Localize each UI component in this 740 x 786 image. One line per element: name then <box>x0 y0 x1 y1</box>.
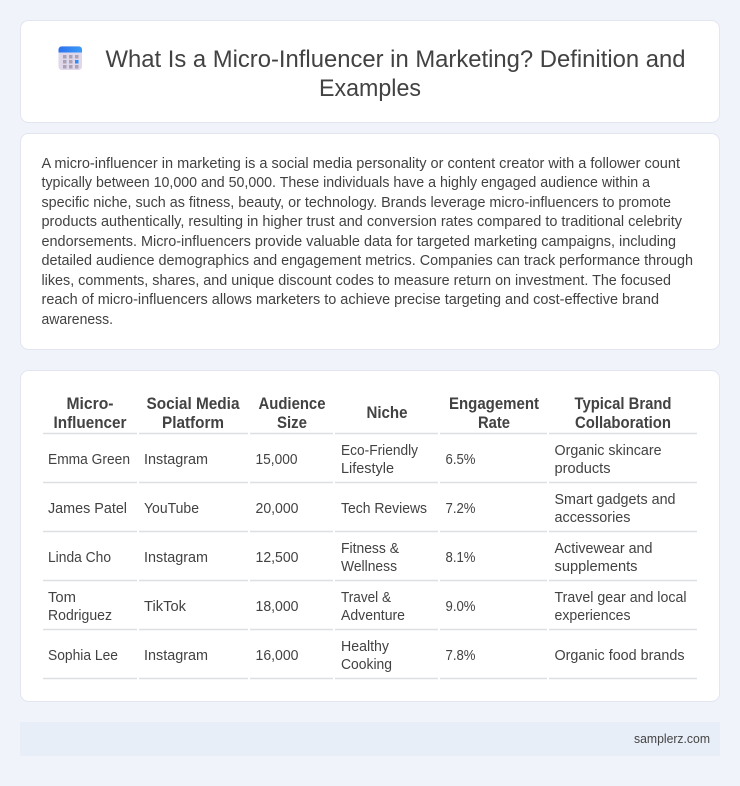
text block: definition paragraph <box>42 156 693 328</box>
table row: Sophia Lee <box>48 639 684 673</box>
heading: Examples <box>319 75 421 102</box>
table row: Tom Rodriguez: Tom <box>48 590 76 606</box>
table row: Sophia Lee: Sophia Lee <box>48 648 118 664</box>
table header: Engagement <box>449 395 540 413</box>
heading <box>106 46 686 102</box>
table row: Sophia Lee: Instagram <box>144 648 208 664</box>
panel: title card <box>20 20 720 122</box>
table row: Emma Green: Instagram <box>144 452 208 468</box>
table row: Tom Rodriguez <box>48 590 686 624</box>
table row: James Patel: James Patel <box>48 501 127 517</box>
table header: Collaboration <box>575 414 671 432</box>
text block: definition paragraph: likes, comments, shares, and unique discount codes to measure return on investment. The focused <box>42 273 671 289</box>
text block: definition paragraph: products authentically, resulting in higher trust and conversion rates compared to traditional celebrity <box>42 214 683 230</box>
table header: Platform <box>162 414 224 432</box>
table header: Typical Brand <box>574 395 672 413</box>
table row: Tom Rodriguez: experiences <box>554 608 630 624</box>
table row: Emma Green: Emma Green <box>48 452 130 468</box>
icon: calendar <box>58 46 82 70</box>
table row: James Patel <box>48 492 676 526</box>
table row: Emma Green: 15,000 <box>256 452 298 468</box>
panel: micro-influencer table <box>20 370 720 702</box>
text block: definition paragraph: detailed audience demographics and engagement metrics. Companies can track performance through <box>42 253 693 269</box>
table row: Tom Rodriguez: TikTok <box>144 599 187 615</box>
footer bar <box>20 722 720 756</box>
table row: Emma Green <box>48 443 662 477</box>
table header: Social Media <box>146 395 240 413</box>
table header: Size <box>277 414 307 432</box>
table row: James Patel: 20,000 <box>256 501 298 517</box>
table row: Sophia Lee: Healthy <box>341 639 390 655</box>
table row: James Patel: Smart gadgets and <box>554 492 676 508</box>
text block: definition paragraph: awareness. <box>42 312 113 328</box>
table row: James Patel: accessories <box>554 510 630 526</box>
table row: Sophia Lee: Organic food brands <box>554 648 684 664</box>
table row: Emma Green: 6.5% <box>446 452 476 468</box>
table row: Linda Cho: supplements <box>554 559 638 575</box>
table row: Linda Cho: Linda Cho <box>48 550 111 566</box>
table row: Tom Rodriguez: 18,000 <box>256 599 298 615</box>
table row: Tom Rodriguez: Travel & <box>341 590 391 606</box>
table row: Sophia Lee: 7.8% <box>446 648 476 664</box>
table row: Linda Cho: 8.1% <box>446 550 476 566</box>
table row: Emma Green: Eco-Friendly <box>341 443 419 459</box>
table row: Sophia Lee: 16,000 <box>256 648 298 664</box>
table row: Linda Cho: Activewear and <box>554 541 652 557</box>
table row: Tom Rodriguez: Travel gear and local <box>554 590 686 606</box>
table row: Linda Cho: Wellness <box>341 559 397 575</box>
table row: Emma Green: products <box>554 461 610 477</box>
panel: definition text <box>20 134 720 350</box>
heading: What Is a Micro-Influencer in Marketing? Definition and <box>106 46 686 73</box>
text block: definition paragraph: reach of micro-influencers allows marketers to achieve precise targeting and cost-effective brand <box>42 292 659 308</box>
table row: Tom Rodriguez: 9.0% <box>446 599 476 615</box>
text block: definition paragraph: A micro-influencer in marketing is a social media personality or content creator with a follower count <box>42 156 680 172</box>
table row: Tom Rodriguez: Adventure <box>341 608 405 624</box>
table header: Influencer <box>54 414 127 432</box>
table header: Rate <box>478 414 510 432</box>
table header: Niche <box>366 404 408 422</box>
table row: Linda Cho: Instagram <box>144 550 208 566</box>
table row: James Patel: Tech Reviews <box>341 501 427 517</box>
text block: definition paragraph: specific niche, such as fitness, beauty, or technology. Brands leverage micro-influencers to promote <box>42 195 671 211</box>
table row: Tom Rodriguez: Rodriguez <box>48 608 112 624</box>
text block: definition paragraph: endorsements. Micro-influencers provide valuable data for targeted marketing campaigns, including <box>42 234 676 250</box>
text block: definition paragraph: typically between 10,000 and 50,000. These individuals have a highly engaged audience within a <box>42 175 651 191</box>
table row: Linda Cho <box>48 541 652 575</box>
table row: Emma Green: Organic skincare <box>554 443 662 459</box>
table row: James Patel: YouTube <box>144 501 199 517</box>
table header <box>54 395 672 432</box>
table header: Micro- <box>66 395 114 413</box>
table row: Linda Cho: 12,500 <box>256 550 298 566</box>
table row: Emma Green: Lifestyle <box>341 461 394 477</box>
table row: Linda Cho: Fitness & <box>341 541 399 557</box>
table header: Audience <box>258 395 326 413</box>
footer bar: samplerz.com <box>634 732 710 746</box>
table row: James Patel: 7.2% <box>446 501 476 517</box>
table row: Sophia Lee: Cooking <box>341 657 392 673</box>
